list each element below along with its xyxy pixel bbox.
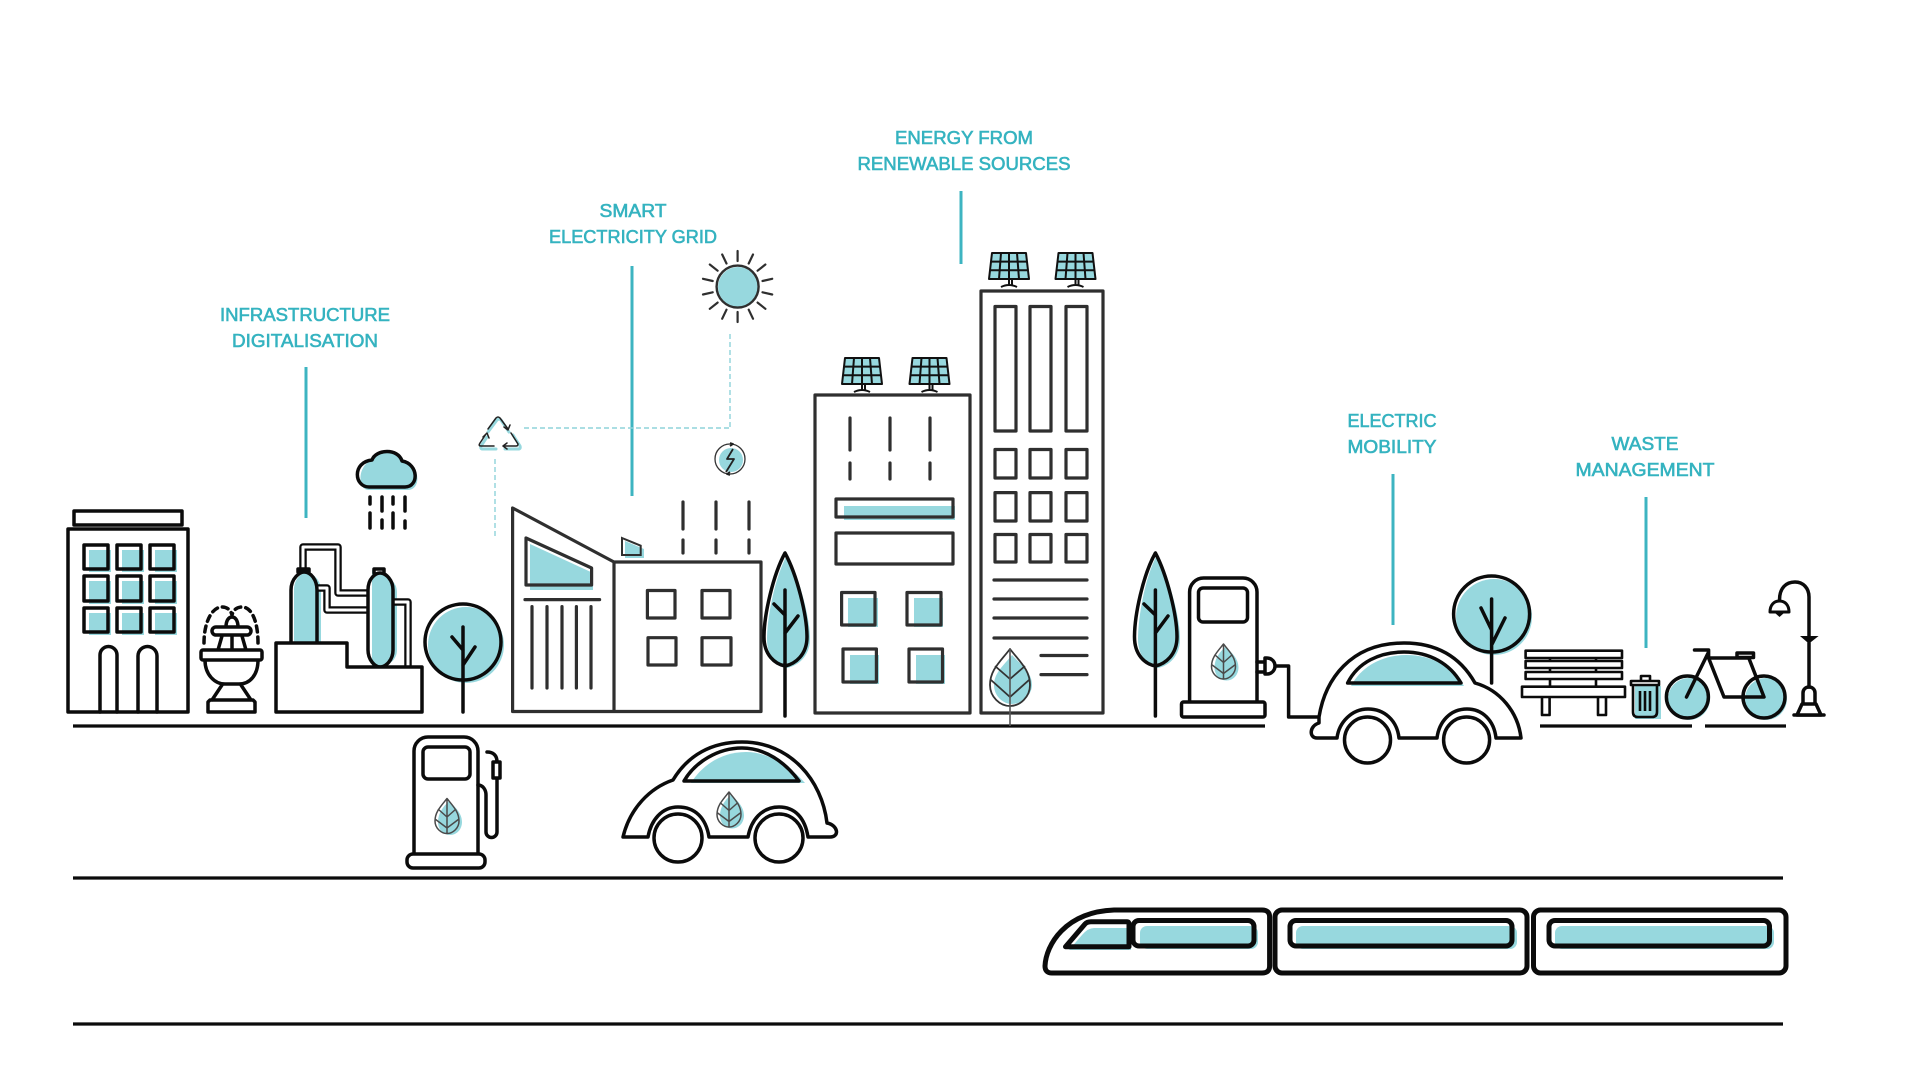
label: electric mobility: ELECTRIC	[1348, 411, 1437, 431]
windows	[647, 590, 731, 665]
icon: bench	[1522, 651, 1625, 715]
label: infrastructure digitalisation: DIGITALISATION	[232, 331, 378, 351]
window fills	[1069, 928, 1131, 950]
label: smart electricity grid: SMART	[600, 201, 666, 221]
icon: office building	[68, 511, 188, 712]
horizontal slats	[994, 580, 1087, 675]
teal windows	[848, 598, 878, 627]
windows	[1066, 922, 1129, 947]
tall windows	[995, 306, 1087, 431]
icon: tall tree right	[1134, 553, 1180, 716]
icon: fuel pump	[407, 737, 500, 868]
label: smart electricity grid	[549, 201, 717, 496]
icon: leaf tree	[990, 649, 1032, 726]
wheels	[1344, 717, 1390, 763]
building shell	[815, 395, 970, 713]
label: infrastructure digitalisation: INFRASTRUCTURE	[220, 305, 390, 325]
pump body	[414, 737, 478, 853]
teal band	[844, 506, 955, 520]
icon: tall tree left	[764, 553, 810, 716]
solar panels	[989, 253, 1029, 287]
hose and nozzle	[478, 752, 500, 838]
icon: recycling triangle	[479, 417, 520, 449]
leaf	[435, 798, 462, 835]
label: waste management: WASTE	[1612, 434, 1678, 454]
icon: train	[1045, 910, 1786, 973]
charger body	[1190, 578, 1257, 702]
icon: mid-rise building	[815, 358, 970, 713]
plug and cable	[1257, 658, 1319, 717]
carriages	[1045, 910, 1786, 973]
icon: bicycle	[1666, 650, 1787, 720]
icon: factory building	[513, 502, 761, 712]
icon: fountain	[201, 607, 262, 712]
leaf	[1212, 644, 1238, 680]
tower shell	[981, 291, 1103, 713]
tank fills	[294, 570, 397, 667]
icon: tower building	[981, 253, 1103, 713]
leaf	[717, 792, 744, 828]
icon: street lamp	[1770, 582, 1824, 715]
factory shell	[513, 508, 761, 712]
label: energy from renewable sources: RENEWABLE SOURCES	[858, 154, 1070, 174]
square windows	[995, 450, 1087, 562]
label: waste management	[1576, 434, 1714, 648]
road lines	[73, 726, 1786, 1024]
dashed connectors	[495, 334, 730, 537]
falling dashes	[683, 502, 749, 553]
windscreen	[691, 752, 805, 783]
icon: energy bolt	[715, 443, 745, 475]
label: energy from renewable sources	[858, 128, 1070, 264]
solar panels	[842, 358, 882, 392]
wheels	[654, 814, 702, 862]
pipes	[303, 547, 408, 667]
slanted window	[530, 544, 593, 590]
icon: sun	[703, 251, 772, 322]
icon: round tree right	[1454, 576, 1532, 683]
label: infrastructure digitalisation	[220, 305, 390, 518]
label: smart electricity grid: ELECTRICITY GRID	[549, 227, 717, 247]
label: energy from renewable sources: ENERGY FROM	[895, 128, 1033, 148]
small skylight	[625, 541, 644, 558]
icon: round tree	[425, 604, 504, 712]
icon: charging station	[1182, 578, 1319, 717]
icon: trash bin	[1631, 676, 1661, 719]
window dashes	[850, 418, 930, 479]
icon: lower car	[623, 742, 836, 862]
icon: water treatment plant	[276, 547, 422, 712]
label: waste management: MANAGEMENT	[1576, 460, 1714, 480]
label: electric mobility: MOBILITY	[1348, 437, 1436, 457]
icon: electric car	[1311, 643, 1521, 763]
icon: rain cloud	[357, 452, 417, 528]
louvres	[525, 600, 600, 688]
windscreen	[1351, 655, 1464, 686]
label: electric mobility	[1348, 411, 1437, 625]
